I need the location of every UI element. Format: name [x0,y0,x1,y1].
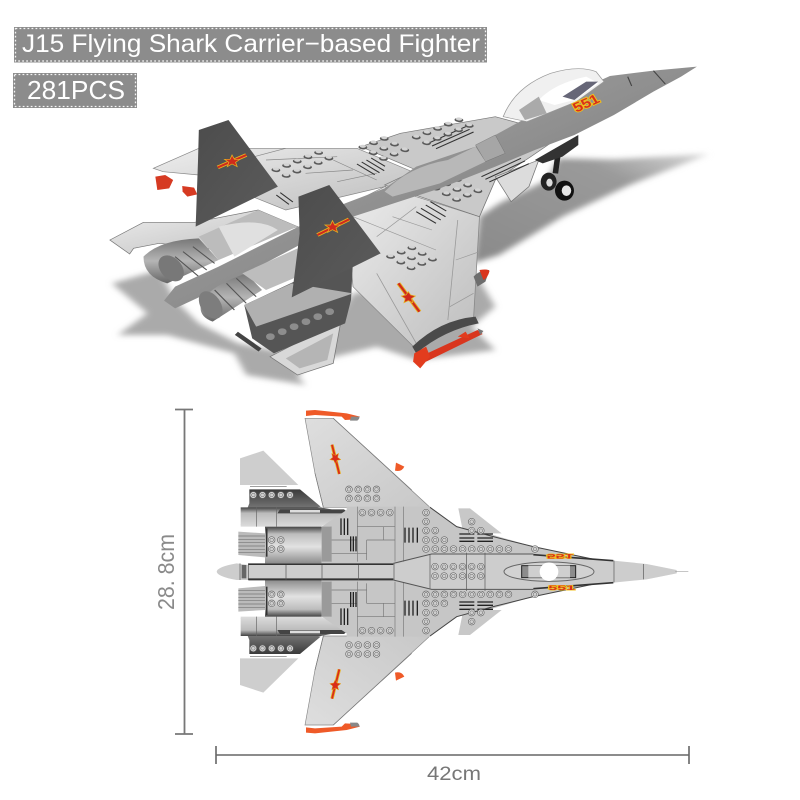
far wing missile mounts [155,175,197,197]
near wing [345,187,479,353]
wing roundel [398,283,419,312]
far tailplane [110,210,298,254]
lower half structure [238,572,677,733]
width dimension [216,746,689,785]
rear fuselage panels [322,572,677,637]
far vertical fin [196,120,278,227]
number 551 lower: 551 [548,585,576,592]
ground shadow [112,154,709,385]
height dimension [153,409,193,734]
canard [458,610,502,635]
fuselage with nose and tail cone [164,67,697,308]
cockpit [504,562,594,581]
perspective view of the fighter [110,67,709,385]
near wing tip missile [413,328,483,368]
wing tip rail [306,723,360,733]
near vertical fin [292,185,381,297]
near engine [194,248,298,322]
dark wing root [241,618,321,654]
height dimension: 28. 8cm [153,534,179,610]
studs on wings and body [276,115,549,268]
tailplane [240,658,298,693]
top-down view of the fighter [217,410,688,733]
tail number 551: 551 [570,92,603,116]
wing pylon missile [474,269,489,287]
centre studs [435,567,490,576]
piece count badge [13,73,137,108]
upper half, mirrored [238,410,677,572]
far engine [143,210,298,285]
landing gear [535,135,578,201]
canopy [503,69,604,122]
engine [265,580,322,617]
piece count badge: 281PCS [27,75,125,105]
central studded body [361,117,563,217]
upper body edge shadow [430,572,677,636]
canard [495,160,539,202]
wing [305,636,430,725]
far wing [153,148,416,210]
vent bars [459,602,493,609]
title badge: J15 Flying Shark Carrier−based Fighter [22,30,480,58]
number 551 upper: 551 [547,552,574,559]
wing roundel [332,669,339,699]
central spine [217,552,688,591]
width dimension: 42cm [427,764,481,785]
near tailplane and dark block [236,260,353,375]
studs [253,594,535,654]
